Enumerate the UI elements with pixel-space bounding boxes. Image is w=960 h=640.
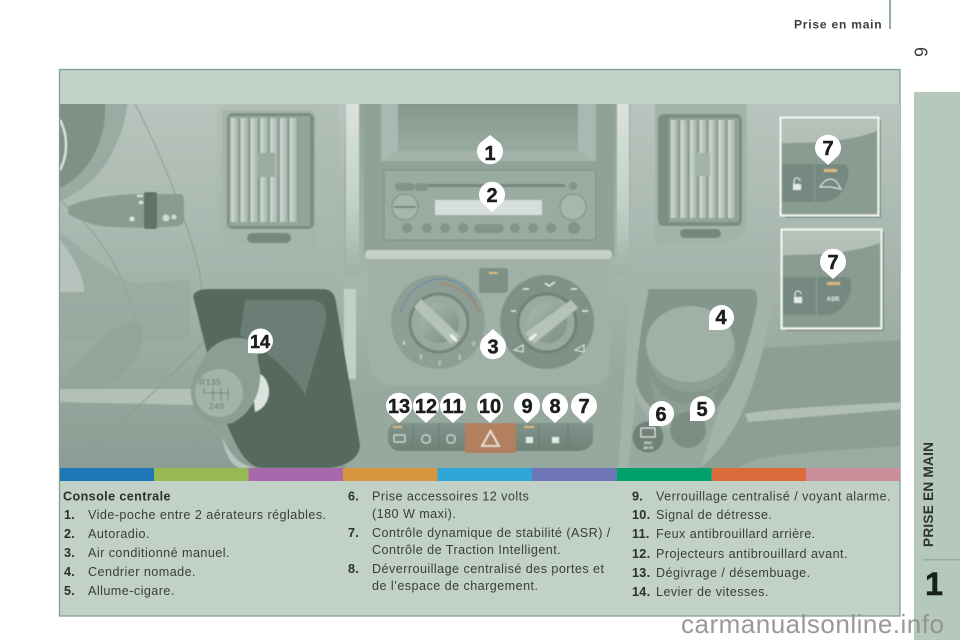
left air vent: [222, 110, 316, 244]
temperature dial: 4: [402, 341, 406, 347]
temperature dial: 1: [458, 355, 462, 361]
text block: right column: Projecteurs antibrouillard avant.: [656, 547, 848, 561]
marker 8: [542, 393, 568, 423]
marker 10: 10: [479, 396, 501, 418]
shift pattern: [195, 369, 243, 417]
marker 13: 13: [388, 396, 410, 418]
temperature dial: [391, 275, 485, 369]
temperature dial: 3: [419, 355, 423, 361]
text block: left column: Cendrier nomade.: [88, 565, 196, 579]
ashtray surround: MAX: [644, 441, 653, 445]
marker 10: [477, 393, 503, 423]
text block: left column: 1.: [64, 508, 75, 522]
marker 12: 12: [415, 396, 437, 418]
cigar lighter: [670, 412, 706, 448]
marker 9: [514, 393, 540, 423]
text block: right column: Signal de détresse.: [656, 508, 772, 522]
text block: right column: 14.: [632, 585, 650, 599]
page number: 9: [912, 47, 932, 57]
text block: right column: 13.: [632, 566, 650, 580]
marker 3: [480, 329, 506, 359]
marker 8: 8: [549, 396, 561, 418]
sidebar: chapter tab: [914, 92, 960, 640]
gear knob: [191, 338, 269, 424]
inset: ESP switch: [780, 118, 881, 218]
text block: middle column: (180 W maxi).: [372, 507, 456, 521]
text block: left column: 5.: [64, 584, 75, 598]
text block: right column: Dégivrage / désembuage.: [656, 566, 811, 580]
illustration: dashboard console: [56, 100, 904, 472]
marker 9: 9: [521, 396, 533, 418]
running header: Prise en main: Prise en main: [794, 18, 882, 32]
radio: [384, 170, 596, 240]
text block: left column: 2.: [64, 527, 75, 541]
right dash: [752, 340, 900, 390]
marker 11: 11: [442, 396, 464, 418]
text block: right column: 10.: [632, 508, 650, 522]
text block: left column: Autoradio.: [88, 527, 150, 541]
chapter title: PRISE EN MAIN: [921, 442, 936, 547]
text block: right column: 12.: [632, 547, 650, 561]
temperature dial: 0: [472, 342, 476, 348]
vent selector dial: [500, 275, 594, 369]
text block: middle column: Prise accessoires 12 volts: [372, 490, 529, 504]
center column: [344, 104, 630, 236]
marker 4: [709, 305, 734, 330]
text block: middle column: 7.: [348, 526, 359, 540]
gear knob: 246: [209, 401, 225, 411]
text block: middle column: de l’espace de chargement.: [372, 579, 538, 593]
text block: left column: 3.: [64, 546, 75, 560]
inset: ASR switch: ASR: [827, 297, 840, 303]
text block: middle column: [348, 490, 611, 593]
text block: right column: Levier de vitesses.: [656, 585, 769, 599]
marker 7: 7: [578, 396, 590, 418]
text block: right column: Feux antibrouillard arrière.: [656, 527, 816, 541]
text block: right column: Verrouillage centralisé / voyant alarme.: [656, 490, 891, 504]
watermark: carmanualsonline.info: [681, 609, 944, 639]
marker 7 ASR inset: [820, 249, 846, 279]
storage bin: [381, 100, 596, 161]
inset: ASR switch: [782, 230, 884, 331]
marker 1: 1: [484, 143, 496, 165]
colour band: [60, 468, 900, 481]
text block: left column: Air conditionné manuel.: [88, 546, 230, 560]
text block: left column: Vide-poche entre 2 aérateurs réglables.: [88, 508, 327, 522]
marker 5: [690, 396, 715, 421]
marker 7 ASR inset: 7: [827, 252, 839, 274]
marker 14: 14: [250, 332, 270, 352]
text block: right column: 9.: [632, 490, 643, 504]
marker 3: 3: [487, 336, 499, 358]
shelf: [365, 250, 612, 259]
lower left dash: [60, 233, 119, 280]
marker 2: [479, 182, 505, 212]
text block: right column: [632, 490, 891, 599]
text block: left column: [63, 490, 327, 598]
marker 6: [649, 401, 674, 426]
temperature dial: 2: [438, 361, 442, 367]
text block: right column: 11.: [632, 527, 650, 541]
stalk: [68, 192, 184, 229]
recirculation button: [479, 268, 508, 293]
ashtray surround: [618, 288, 771, 472]
ashtray surround: 180 W: [643, 446, 654, 450]
text block: middle column: Contrôle de Traction Intelligent.: [372, 543, 561, 557]
text block: left column: Allume-cigare.: [88, 584, 175, 598]
gear knob: R135: [199, 377, 221, 387]
marker 11: [440, 393, 466, 423]
climate panel: [346, 268, 618, 468]
text block: left column: 4.: [64, 565, 75, 579]
text block: middle column: Contrôle dynamique de stabilité (ASR) /: [372, 526, 611, 540]
marker 13: [386, 393, 412, 423]
marker 5: 5: [696, 399, 708, 421]
radio display: [435, 200, 542, 215]
right air vent: [655, 104, 747, 246]
steering wheel shadow: [60, 104, 106, 188]
marker 7: [571, 393, 597, 423]
switch bank: [388, 423, 593, 453]
gear boot: [193, 289, 360, 468]
marker 7 ESP inset: [815, 135, 841, 165]
accessory socket: [632, 421, 664, 453]
text block: left column: Console centrale: [63, 490, 171, 504]
text block: middle column: 6.: [348, 490, 359, 504]
marker 7 ESP inset: 7: [822, 138, 834, 160]
marker 14: [248, 328, 273, 354]
marker 4: 4: [715, 307, 727, 329]
marker 12: [413, 393, 439, 423]
marker 6: 6: [655, 404, 667, 426]
panel: console centrale: [56, 70, 904, 616]
marker 1: [477, 135, 503, 165]
header divider: [889, 0, 891, 29]
chapter number: 1: [925, 566, 943, 602]
text block: middle column: Déverrouillage centralisé des portes et: [372, 562, 605, 576]
text block: middle column: 8.: [348, 562, 359, 576]
marker 2: 2: [486, 185, 498, 207]
